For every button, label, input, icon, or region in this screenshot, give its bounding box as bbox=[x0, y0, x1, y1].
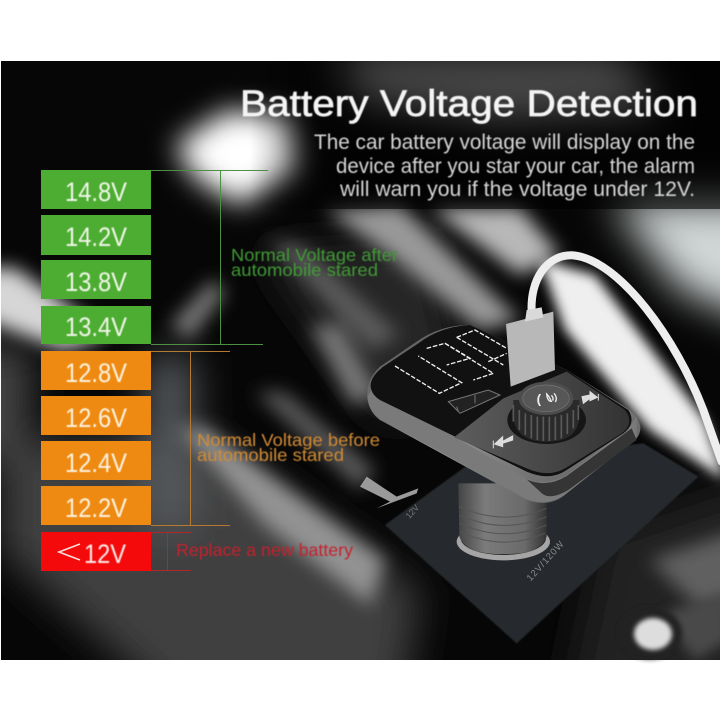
green voltage bars: 14.2V bbox=[65, 222, 127, 252]
green voltage bars bbox=[41, 170, 151, 344]
console black plate bbox=[385, 443, 698, 643]
green voltage bars: 13.8V bbox=[65, 267, 127, 297]
LED display digits bbox=[395, 330, 507, 393]
orange label bbox=[197, 430, 380, 465]
USB plug bbox=[506, 312, 555, 387]
volume knob: ( bbox=[537, 391, 542, 406]
title backing panel bbox=[250, 61, 720, 209]
orange voltage bars: 12.4V bbox=[65, 448, 127, 478]
orange voltage bars bbox=[41, 351, 151, 525]
orange voltage bars: 12.6V bbox=[65, 403, 127, 433]
title: Battery Voltage Detection bbox=[240, 83, 698, 124]
USB cable bbox=[532, 255, 720, 462]
next track icon bbox=[582, 392, 598, 403]
console round knob bbox=[618, 607, 682, 659]
volume knob bbox=[507, 382, 586, 444]
car charger device bbox=[360, 255, 720, 643]
previous track icon bbox=[493, 436, 513, 448]
red voltage bar bbox=[41, 532, 151, 571]
console black plate: 12V bbox=[403, 502, 421, 521]
description text: device after you star your car, the alarm bbox=[336, 155, 695, 178]
description text: The car battery voltage will display on the bbox=[314, 131, 695, 154]
green voltage bars: 14.8V bbox=[65, 177, 127, 207]
control plate bbox=[454, 372, 629, 473]
green label: automobile stared bbox=[231, 260, 378, 280]
console black plate: 12V/120W bbox=[525, 539, 566, 583]
mode buttons bbox=[448, 390, 500, 413]
orange label: Normal Voltage before bbox=[197, 430, 380, 450]
red voltage bar: 12V bbox=[84, 539, 126, 569]
description text: will warn you if the voltage under 12V. bbox=[339, 178, 695, 201]
red label: Replace a new battery bbox=[176, 540, 353, 560]
orange label: automobile stared bbox=[197, 445, 344, 465]
orange voltage bars: 12.8V bbox=[65, 358, 127, 388]
green label: Normal Voltage after bbox=[231, 245, 398, 265]
description text bbox=[314, 131, 695, 201]
red bracket bbox=[151, 532, 191, 570]
socket cylinder bbox=[457, 483, 550, 560]
orange bracket bbox=[151, 351, 230, 526]
green voltage bars: 13.4V bbox=[65, 312, 127, 342]
orange voltage bars: 12.2V bbox=[65, 493, 127, 523]
green bracket bbox=[151, 170, 268, 344]
green label bbox=[231, 245, 398, 280]
device body bbox=[367, 325, 640, 503]
silver slot bbox=[360, 477, 418, 508]
